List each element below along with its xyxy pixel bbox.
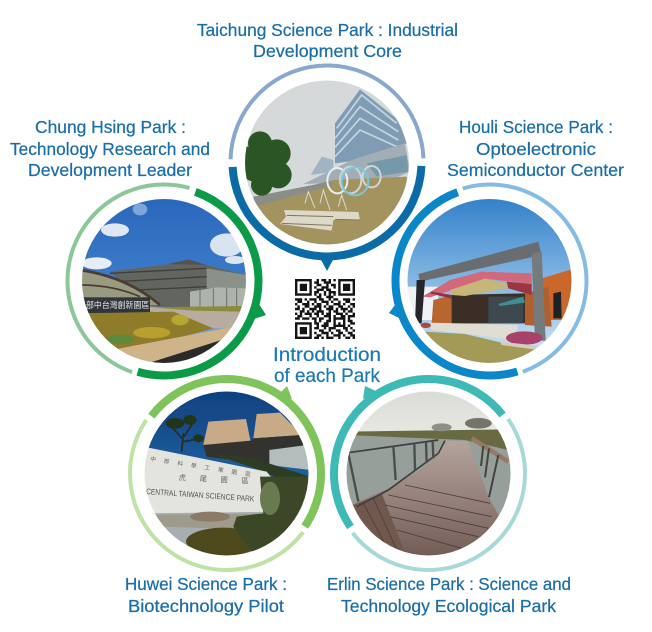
photo: Taichung Science Park building and sculpture (245, 80, 409, 244)
center caption: Introduction of each Park (273, 344, 381, 387)
heading: Chung Hsing Park: Development Leader (28, 160, 192, 180)
center caption: Introduction of each Park: Introduction (273, 344, 381, 366)
photo: Huwei Science Park wall and sign: 中部科學工業園區 (150, 455, 252, 479)
ring: Huwei Science Park (91, 338, 362, 609)
QR code (295, 279, 355, 339)
ring: Chung Hsing Park (41, 158, 287, 404)
center caption: Introduction of each Park: of each Park (274, 365, 380, 387)
ring: Taichung Science Park (227, 62, 427, 271)
heading: Chung Hsing Park (10, 117, 210, 180)
heading: Taichung Science Park: Taichung Science Park : Industrial (197, 20, 458, 40)
heading: Taichung Science Park (197, 20, 458, 61)
photo: Huwei Science Park wall and sign: 虎尾園區 (179, 473, 249, 486)
ring: Houli Science Park (371, 162, 609, 400)
heading: Houli Science Park (447, 117, 624, 180)
heading: Chung Hsing Park: Chung Hsing Park : (35, 117, 186, 137)
heading: Huwei Science Park: Biotechnology Pilot (128, 596, 284, 616)
heading: Erlin Science Park (327, 574, 571, 616)
heading: Houli Science Park: Semiconductor Center (447, 160, 624, 180)
heading: Houli Science Park: Houli Science Park : (459, 117, 613, 137)
heading: Huwei Science Park (125, 574, 287, 616)
photo: Huwei Science Park wall and sign (144, 392, 308, 556)
heading: Taichung Science Park: Development Core (253, 41, 402, 61)
heading: Huwei Science Park: Huwei Science Park : (125, 574, 287, 594)
photo: Houli Science Park entrance (408, 199, 572, 363)
heading: Erlin Science Park: Technology Ecological Park (341, 596, 556, 616)
photo: Huwei Science Park wall and sign: CENTRAL TAIWAN SCIENCE PARK (146, 487, 255, 504)
ring: Erlin Science Park (295, 340, 562, 607)
photo: Chung Hsing Park greenhouse (82, 199, 246, 363)
photo: Erlin Science Park boardwalk (346, 392, 510, 556)
heading: Houli Science Park: Optoelectronic (476, 139, 596, 159)
photo: Chung Hsing Park greenhouse: 部中台灣創新園區 (86, 300, 149, 310)
heading: Erlin Science Park: Erlin Science Park : Science and (327, 574, 571, 594)
heading: Chung Hsing Park: Technology Research and (10, 139, 210, 159)
